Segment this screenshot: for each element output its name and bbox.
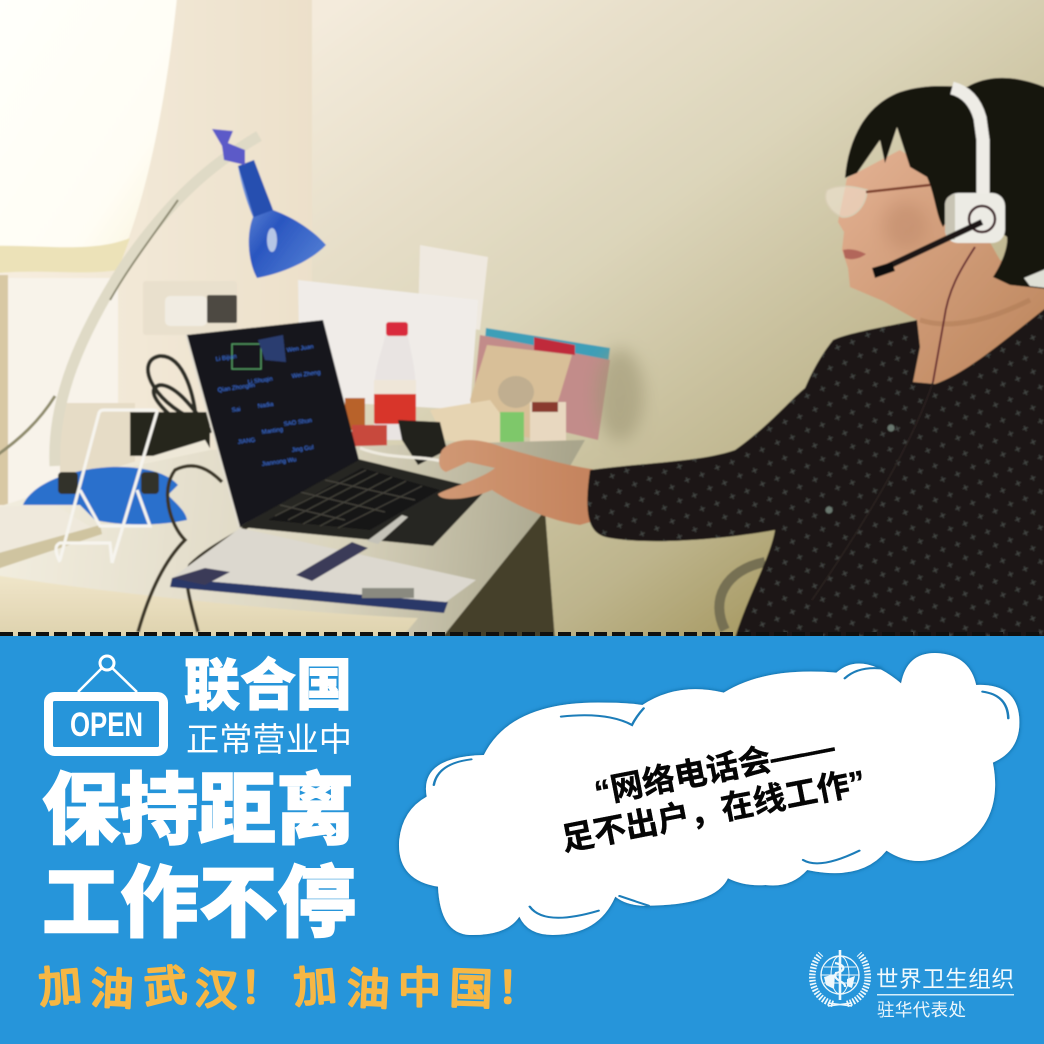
wall shadow behind folder xyxy=(596,349,644,441)
notebook on desk xyxy=(170,528,476,613)
clamp knobs xyxy=(58,472,159,494)
slogan: go China: 加油中国！ xyxy=(291,950,540,1018)
neck and face xyxy=(838,150,1044,384)
window with curtain xyxy=(0,0,178,508)
laptop screen xyxy=(186,320,359,527)
laptop base with keyboard xyxy=(239,459,486,546)
cardigan xyxy=(587,300,1044,648)
divider under WHO name xyxy=(877,994,1014,996)
WHO China office: 驻华代表处 xyxy=(877,1000,966,1020)
glasses xyxy=(825,185,930,217)
hand on trackpad xyxy=(438,440,597,525)
WHO name: 世界卫生组织 xyxy=(876,967,1014,992)
charger xyxy=(398,420,447,465)
laptop screen: Jiannong Wu xyxy=(261,457,297,468)
laptop screen: Jing Gul xyxy=(291,445,314,454)
black box and power strip xyxy=(114,412,232,519)
heading: work does not stop: 工作不停 xyxy=(42,859,356,947)
wall socket with plugs xyxy=(143,281,237,335)
hair xyxy=(845,78,1044,290)
white charger cable xyxy=(360,448,445,462)
water bottle xyxy=(374,322,416,440)
laptop screen: Li Bijian xyxy=(215,354,237,363)
white book on desk xyxy=(0,505,102,572)
slogan: go Wuhan: 加油武汉！ xyxy=(36,950,283,1019)
headset xyxy=(812,88,1005,600)
white wire phone stand xyxy=(56,410,157,563)
laptop screen: Wen Juan xyxy=(286,344,314,354)
subheading: open for business: 正常营业中 xyxy=(186,721,352,758)
collar on right edge xyxy=(1024,268,1044,288)
open label: OPEN xyxy=(70,706,143,744)
lamp arm xyxy=(0,136,259,466)
heading: keep distance: 保持距离 xyxy=(42,766,354,854)
desk xyxy=(0,440,585,640)
blue lamp base xyxy=(23,467,187,524)
open sign icon xyxy=(48,656,164,752)
laptop screen: SAO Shun xyxy=(283,418,312,428)
right wall xyxy=(300,0,1044,648)
cables across desk xyxy=(138,466,250,632)
photo: woman on a teleconference at home desk xyxy=(0,0,1044,648)
dashed seam xyxy=(0,632,1044,636)
chair back xyxy=(719,562,765,630)
laptop screen: Li Shuqin xyxy=(247,377,273,386)
laptop screen: Wei Zheng xyxy=(291,370,321,380)
laptop screen: Sai xyxy=(231,407,241,414)
WHO emblem xyxy=(812,950,868,1006)
laptop screen: JIANG xyxy=(237,438,256,446)
small jars xyxy=(345,398,387,447)
blue lower panel xyxy=(0,636,1044,1044)
heading: United Nations: 联合国 xyxy=(184,654,352,717)
speech cloud xyxy=(399,653,1019,935)
cloud caption: “网络电话会—— xyxy=(591,729,838,811)
papers behind laptop xyxy=(298,245,488,410)
power cables behind laptop xyxy=(148,356,212,440)
tissue box and paper bag xyxy=(430,345,572,450)
laptop screen: Manting xyxy=(261,427,283,436)
laptop screen: Nadia xyxy=(257,402,274,410)
left wall xyxy=(0,0,312,648)
laptop screen: Qian Zhonglin xyxy=(217,383,255,394)
pink and teal folders xyxy=(472,328,610,440)
cloud caption: 足不出户，在线工作” xyxy=(558,764,868,858)
lamp head xyxy=(212,129,326,278)
